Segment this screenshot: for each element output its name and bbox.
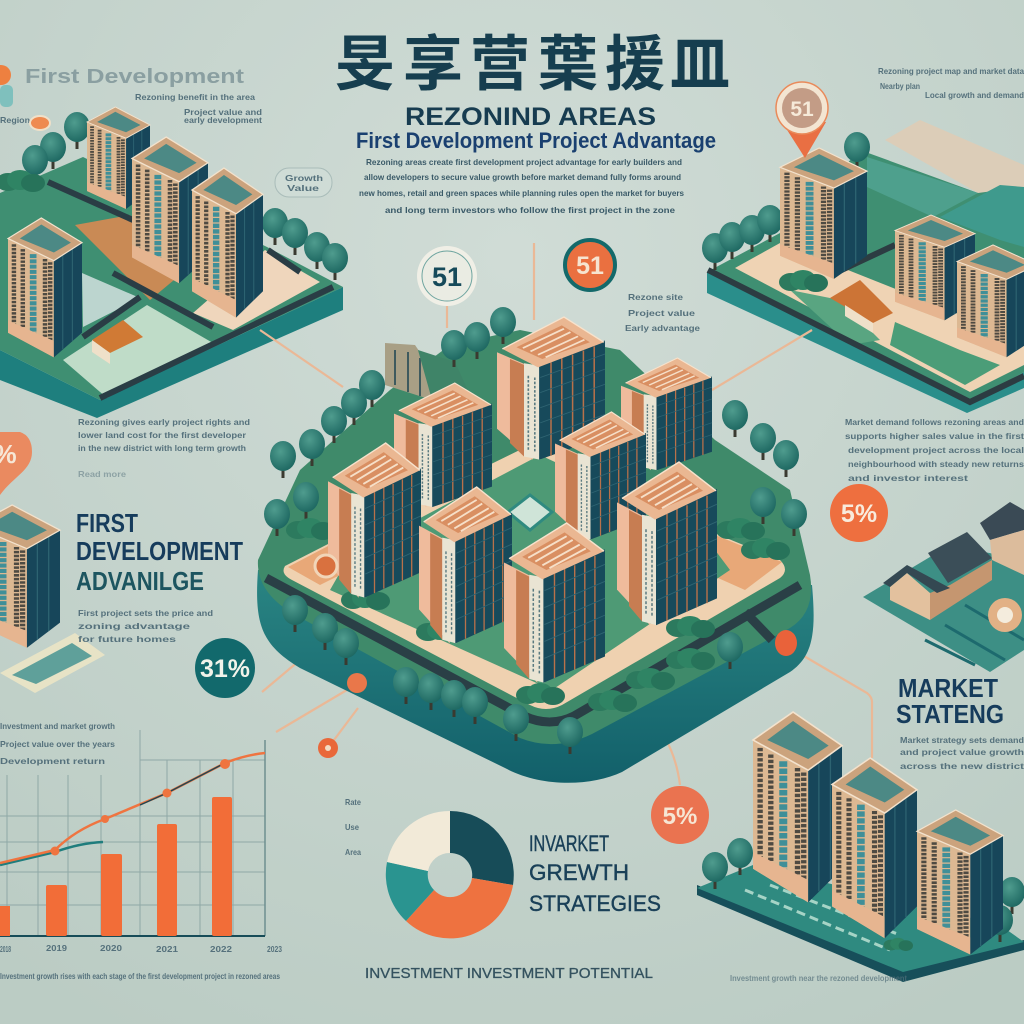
text block: top right note xyxy=(878,66,1024,100)
text block: near callouts: Early advantage xyxy=(625,323,700,333)
tower B7 xyxy=(504,523,605,683)
peach lots xyxy=(735,243,1024,392)
tower xyxy=(0,505,60,648)
back annex building xyxy=(385,343,470,400)
text block: right note: Market demand follows rezoning areas and xyxy=(845,417,1024,427)
heading: market growth strategies: INVARKET xyxy=(529,831,609,856)
road xyxy=(266,578,800,722)
green lots xyxy=(790,290,880,345)
text block: donut note: Use xyxy=(345,822,359,832)
tower xyxy=(957,245,1024,357)
teal hill right xyxy=(940,185,1024,247)
dot marker left xyxy=(347,673,367,693)
text block: left note: Read more xyxy=(78,469,126,479)
text block: right note: and investor interest xyxy=(848,473,968,483)
text block: under heading: for future homes xyxy=(78,634,176,644)
text block: chart heading: Project value over the years xyxy=(0,739,115,749)
house xyxy=(830,280,893,333)
sign marker xyxy=(315,555,337,577)
text block: top left note: Rezoning benefit in the area xyxy=(135,92,255,102)
garden lot xyxy=(63,305,213,398)
road xyxy=(708,245,1024,402)
heading: first development (top left): First Development xyxy=(25,66,244,88)
chart caption: Investment growth rises with each stage of the first development project in rezoned areas xyxy=(0,971,280,981)
heading: market growth strategies xyxy=(529,831,661,916)
panel: right housing scene xyxy=(863,502,1024,672)
text block: under heading: First project sets the price and xyxy=(78,608,213,618)
text block: near callouts: Rezone site xyxy=(628,292,683,302)
text block: left note xyxy=(78,417,250,479)
heading: first development advantage: FIRST xyxy=(76,508,138,538)
inner ground xyxy=(330,455,730,690)
tower xyxy=(780,148,867,279)
text block: chart heading xyxy=(0,721,115,766)
trees xyxy=(702,132,870,292)
callout: 5% lower xyxy=(651,786,709,844)
text block: left note: Rezoning gives early project rights and xyxy=(78,417,250,427)
roads xyxy=(48,182,333,398)
tower xyxy=(917,810,1003,954)
intro paragraph: allow developers to secure value growth before market demand fully forms around xyxy=(364,172,681,182)
icon: left pin xyxy=(0,432,32,495)
platform side xyxy=(697,885,1024,982)
text block: near callouts: Project value xyxy=(628,308,695,318)
callout: 51: 51 xyxy=(432,262,462,292)
subtitle: rezoning areas: REZONIND AREAS xyxy=(405,103,656,131)
text block: top left note xyxy=(0,92,262,125)
central lots xyxy=(75,215,180,300)
callout: 5% lower: 5% xyxy=(663,803,697,830)
text block: market note: across the new district xyxy=(900,761,1024,771)
orange forecourt left xyxy=(288,545,350,585)
sidewalk xyxy=(284,440,785,709)
text block: under heading xyxy=(78,608,213,644)
tower B8 xyxy=(617,462,717,625)
text block: top left note: early development xyxy=(184,115,262,125)
text block: right note: supports higher sales value in the first xyxy=(845,431,1024,441)
plaza pattern xyxy=(745,885,900,950)
heading: market strategy: MARKET xyxy=(898,673,998,703)
platform side xyxy=(707,272,1024,413)
donut chart xyxy=(386,811,514,938)
tower xyxy=(832,758,917,938)
round emblem xyxy=(988,598,1022,632)
chart: bars and trend lines xyxy=(0,730,265,936)
chart axis labels: 2023 xyxy=(267,944,282,954)
chart axis labels xyxy=(0,943,282,954)
chart axis labels: 2022 xyxy=(210,944,232,954)
chart axis labels: 2019 xyxy=(46,943,67,953)
icon: pin with 51 xyxy=(776,82,828,158)
callout: orange 51: 51 xyxy=(576,252,604,280)
house left xyxy=(883,532,992,620)
tower xyxy=(87,107,150,209)
text block: donut note: Area xyxy=(345,847,361,857)
icon: top-left pin xyxy=(0,65,13,107)
intro paragraph: Rezoning areas create first development project advantage for early builders and xyxy=(366,157,682,167)
text block: donut note xyxy=(345,797,361,857)
text block: top right note: Nearby plan xyxy=(880,81,920,91)
bush xyxy=(884,938,913,951)
platform top xyxy=(0,157,343,400)
platform side xyxy=(0,287,343,418)
platform pattern xyxy=(925,605,1024,665)
callout: 5%: 5% xyxy=(841,500,877,528)
text block: right note: development project across the local xyxy=(848,445,1024,455)
caption under towers: Investment growth near the rezoned development xyxy=(730,973,907,983)
intro paragraph: and long term investors who follow the first project in the zone xyxy=(385,205,675,215)
house right xyxy=(980,502,1024,575)
tower xyxy=(8,218,82,357)
orange trend line xyxy=(0,753,265,863)
subtitle: first development project advantage: First Development Project Advantage xyxy=(356,128,716,153)
text block: market note xyxy=(900,735,1024,771)
platform top xyxy=(258,330,811,744)
callout: 51 xyxy=(417,246,477,306)
heading: first development advantage xyxy=(76,508,243,596)
heading: market growth strategies: GREWTH xyxy=(529,860,629,885)
map backdrop xyxy=(885,120,1024,205)
heading: first development advantage: ADVANILGE xyxy=(76,566,204,596)
platform top xyxy=(707,150,1024,402)
panel: bottom-right towers scene xyxy=(697,712,1024,982)
text block: chart heading: Investment and market growth xyxy=(0,721,115,731)
text block: top left note: Region xyxy=(0,115,30,125)
water lot xyxy=(82,273,140,327)
footer label: INVESTMENT INVESTMENT POTENTIAL xyxy=(365,965,653,982)
dark trend segment xyxy=(140,763,225,805)
panel: top-left development scene xyxy=(0,107,348,418)
house xyxy=(92,320,143,364)
callout: 31% xyxy=(195,638,255,698)
text block: right note xyxy=(845,417,1024,483)
text block: donut note: Rate xyxy=(345,797,361,807)
map sheet xyxy=(0,633,105,693)
green lots right xyxy=(890,322,1000,385)
chart axis labels: 2020 xyxy=(100,943,122,953)
intro paragraph xyxy=(359,157,684,215)
tower xyxy=(895,215,975,320)
peach forecourt xyxy=(193,250,320,330)
platform side xyxy=(257,570,814,783)
heading: first development advantage: DEVELOPMENT xyxy=(76,536,243,566)
tower xyxy=(192,168,263,318)
callout: 5% xyxy=(830,484,888,542)
text block: market note: Market strategy sets demand xyxy=(900,735,1024,745)
trees xyxy=(702,838,1024,942)
connector lines xyxy=(260,243,872,785)
main isometric development xyxy=(257,307,814,783)
callout: growth capsule xyxy=(275,168,332,197)
back trees xyxy=(264,307,807,536)
central pond xyxy=(508,495,552,530)
tower B4 xyxy=(328,443,421,598)
markers xyxy=(50,759,230,856)
platform xyxy=(863,545,1024,672)
intro paragraph: new homes, retail and green spaces while planning rules open the market for buyers xyxy=(359,188,684,198)
icon: small marker xyxy=(30,116,50,130)
text block: under heading: zoning advantage xyxy=(78,621,190,631)
dot marker lower xyxy=(318,738,338,758)
platform top xyxy=(697,865,1024,972)
teal hill xyxy=(867,157,978,217)
trees xyxy=(0,112,348,280)
chart axis labels: 2021 xyxy=(156,944,178,954)
title: Chinese headline: 旻享营葉援皿 xyxy=(335,16,730,103)
tower xyxy=(132,137,208,283)
panel: top-right development scene xyxy=(702,120,1024,413)
text block: left note: lower land cost for the first developer xyxy=(78,430,247,440)
callout: orange 51 xyxy=(565,240,615,290)
front trees xyxy=(282,595,743,754)
tower B5 xyxy=(555,412,646,540)
text block: left note: in the new district with long term growth xyxy=(78,443,246,453)
text block: right note: neighbourhood with steady new returns xyxy=(848,459,1024,469)
icon: pin with 51: 51 xyxy=(790,98,814,121)
tower B3 xyxy=(394,383,492,507)
chart axis labels: 2018 xyxy=(0,944,11,954)
heading: market strategy xyxy=(896,673,1004,729)
text block: market note: and project value growth xyxy=(900,747,1024,757)
callout: 31%: 31% xyxy=(200,655,250,683)
heading: market growth strategies: STRATEGIES xyxy=(529,891,661,916)
shrubs xyxy=(286,518,790,712)
bars xyxy=(0,797,232,936)
tower xyxy=(753,712,842,902)
text block: near callouts xyxy=(625,292,700,333)
orange forecourt right xyxy=(700,535,782,590)
tower B2 xyxy=(621,358,712,470)
callout: growth capsule: Growth xyxy=(285,173,323,183)
teal trend line xyxy=(0,842,103,865)
text block: chart heading: Development return xyxy=(0,756,105,766)
heading: market strategy: STATENG xyxy=(896,699,1004,729)
text block: top left note: Project value and xyxy=(184,107,262,117)
callout: growth capsule: Value xyxy=(287,183,319,193)
tower B6 xyxy=(419,487,512,643)
panel: left tower scene xyxy=(0,505,105,693)
dot marker right xyxy=(775,630,797,656)
tower B1 xyxy=(497,317,605,460)
